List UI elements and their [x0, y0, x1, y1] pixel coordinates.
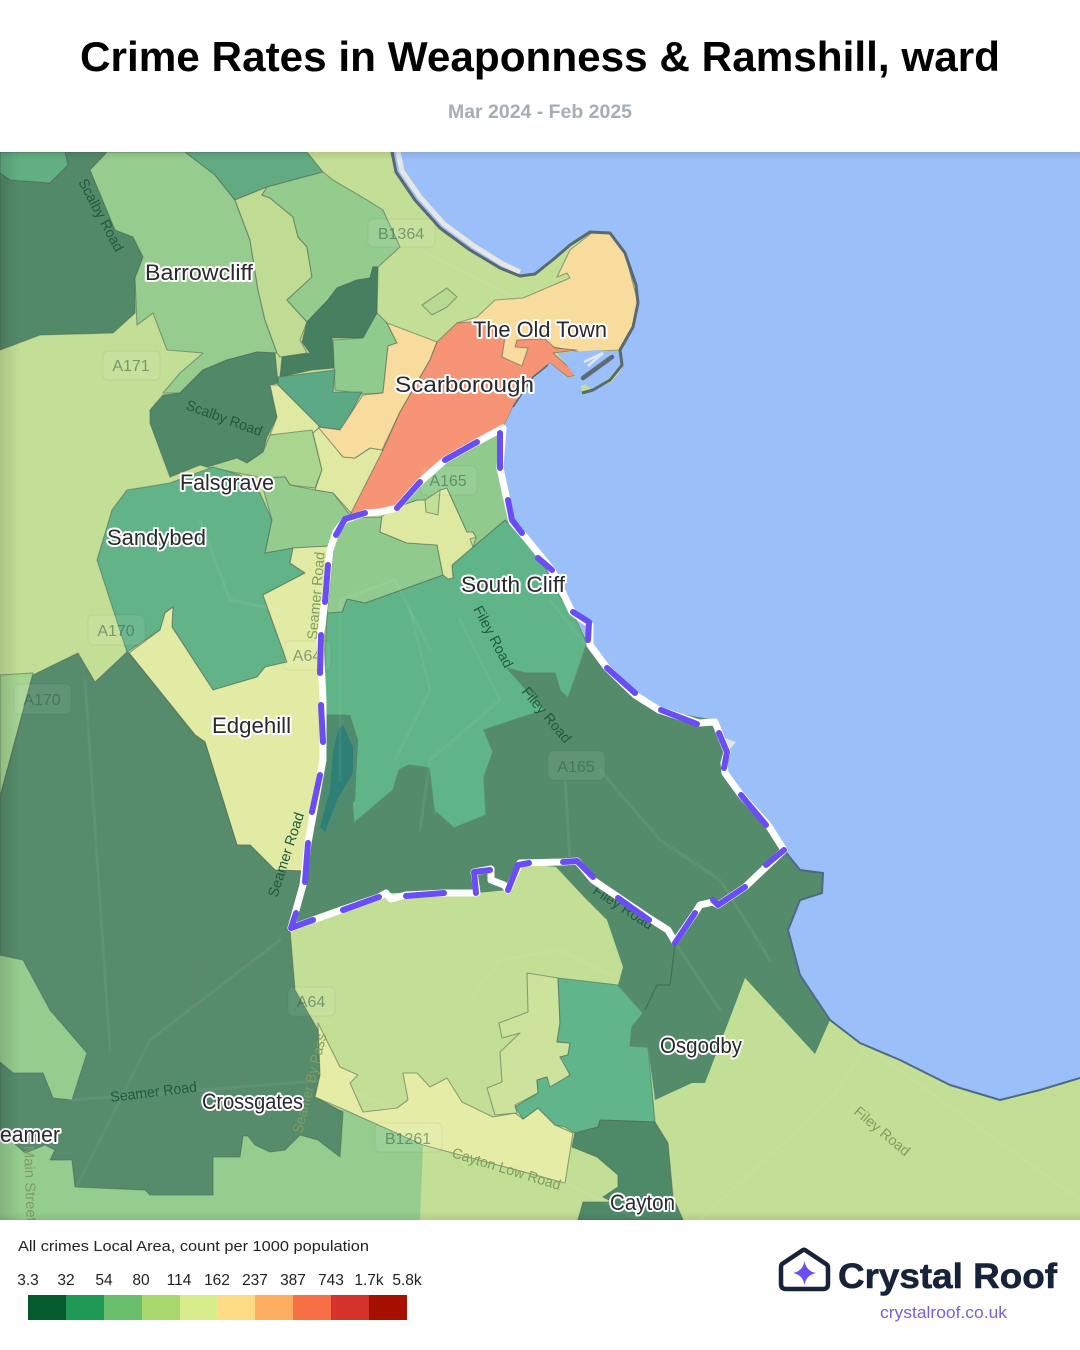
- street network: [70, 519, 867, 1220]
- road shields: A170: [23, 692, 61, 709]
- legend value labels: 32: [57, 1272, 75, 1289]
- road shields: A165: [429, 473, 467, 490]
- road labels: Seamer Road: [266, 811, 308, 899]
- region: lake surround: [345, 715, 358, 804]
- road shields: A64: [293, 648, 321, 665]
- road labels: Filey Road: [590, 883, 656, 933]
- region: dark block: [280, 267, 378, 377]
- website link: crystalroof.co.uk: [880, 1304, 1008, 1322]
- road labels: Filey Road: [469, 603, 516, 671]
- road shields: B1364: [378, 226, 424, 243]
- place labels: Sandybed: [107, 525, 206, 550]
- date range subtitle: Mar 2024 - Feb 2025: [448, 102, 632, 123]
- region: green square: [333, 313, 397, 394]
- boundary squiggle: crossgates: [192, 965, 293, 1088]
- road shields: A165: [557, 759, 595, 776]
- harbour jetties: [584, 353, 603, 366]
- legend title: All crimes Local Area, count per 1000 population: [18, 1238, 369, 1255]
- road labels: Main Street: [20, 1146, 39, 1222]
- region: Cayton dark: [572, 1120, 683, 1220]
- wordmark: Crystal Roof: [838, 1257, 1057, 1296]
- ward boundary: Weaponness & Ramshill: [291, 428, 784, 943]
- legend value labels: 54: [95, 1272, 113, 1289]
- road labels: [20, 176, 913, 1222]
- region: top mid green: [185, 152, 323, 200]
- region: Scalby Road dark: [150, 352, 278, 477]
- region: Scarborough salmon: [350, 322, 577, 515]
- region: west dark: [0, 652, 343, 1195]
- boundary white casing: [291, 428, 784, 942]
- region: pale ward centre: [380, 488, 476, 579]
- place labels: eamer: [0, 1122, 60, 1147]
- place labels: [0, 260, 743, 1215]
- legend value labels: 5.8k: [392, 1272, 422, 1289]
- legend value labels: 162: [204, 1272, 230, 1289]
- legend: [17, 1238, 422, 1320]
- title: Crime Rates in Weaponness & Ramshill, ward: [80, 33, 1000, 80]
- region: Barrowcliff: [90, 152, 277, 393]
- road labels: Seamer Road: [305, 551, 329, 640]
- region: pale Falsgrave east: [312, 426, 383, 514]
- road shields: [14, 219, 605, 1152]
- place labels: Edgehill: [212, 713, 291, 738]
- sea: [392, 152, 1080, 1100]
- road shields: B1261: [385, 1131, 431, 1148]
- road labels: Seamer By Pass: [290, 1032, 331, 1135]
- region: lighter lime enclave: [487, 973, 570, 1115]
- boundary purple dashes: [291, 433, 784, 943]
- boundary: osgodby split: [645, 945, 675, 1010]
- road shields: A171: [112, 358, 150, 375]
- panel: choropleth map: [0, 152, 1080, 1222]
- harbour pier: [583, 357, 612, 378]
- road labels: Seamer Road: [110, 1079, 198, 1106]
- region: dark green strip: [278, 370, 362, 430]
- place labels: Scarborough: [395, 372, 534, 397]
- region: Osgodby mid green: [515, 978, 655, 1133]
- region: green wedge in ward: [404, 435, 510, 548]
- region: South Cliff mid green: [323, 520, 587, 828]
- region: top-left mid green: [0, 152, 68, 183]
- road labels: Filey Road: [850, 1104, 913, 1160]
- harbour water: [558, 351, 620, 389]
- beach: [398, 152, 520, 272]
- region: Sandybed: [97, 467, 305, 690]
- road labels: Scalby Road: [74, 176, 126, 255]
- road labels: Filey Road: [518, 684, 574, 747]
- place labels: South Cliff: [461, 572, 566, 597]
- region: pale south band: [315, 1023, 573, 1183]
- legend value labels: 80: [132, 1272, 150, 1289]
- region: Old Town cream: [457, 232, 638, 372]
- icon: house with star: [781, 1250, 828, 1289]
- place labels: Cayton: [610, 1190, 675, 1215]
- legend colour scale: [28, 1295, 407, 1320]
- place labels: Falsgrave: [180, 470, 274, 495]
- region: upper centre green: [262, 172, 400, 322]
- region: pale north of Falsgrave: [270, 385, 320, 435]
- road labels: Scalby Road: [184, 398, 264, 440]
- legend value labels: [17, 1272, 422, 1289]
- region: light green west of South Cliff: [327, 517, 443, 613]
- logo: Crystal Roof: [781, 1250, 1057, 1322]
- place labels: Osgodby: [660, 1033, 743, 1058]
- road labels: Cayton Low Road: [450, 1146, 563, 1194]
- legend value labels: 237: [242, 1272, 268, 1289]
- legend value labels: 3.3: [17, 1272, 39, 1289]
- region: Edgehill: [129, 546, 330, 871]
- coastline: [392, 152, 1080, 1100]
- road shields: A170: [97, 623, 135, 640]
- legend value labels: 114: [167, 1272, 192, 1289]
- small lime patches: [422, 288, 457, 315]
- place labels: Crossgates: [202, 1089, 303, 1114]
- place labels: The Old Town: [473, 317, 607, 342]
- region: Falsgrave green: [207, 430, 322, 488]
- lake: [320, 725, 353, 832]
- legend value labels: 1.7k: [354, 1272, 384, 1289]
- region: left light green: [0, 673, 33, 797]
- region: cream west: [318, 323, 437, 458]
- place labels: Barrowcliff: [145, 260, 254, 285]
- legend value labels: 387: [280, 1272, 306, 1289]
- road shields: A64: [297, 994, 325, 1011]
- region: ward and Osgodby dark: [290, 643, 830, 1100]
- region: bottom-left light green: [0, 955, 423, 1220]
- region: lime strip: [235, 187, 312, 357]
- foreshore: [725, 738, 736, 752]
- region: north-west dark area: [0, 152, 143, 350]
- region: Falsgrave south green: [260, 477, 350, 553]
- legend value labels: 743: [318, 1272, 344, 1289]
